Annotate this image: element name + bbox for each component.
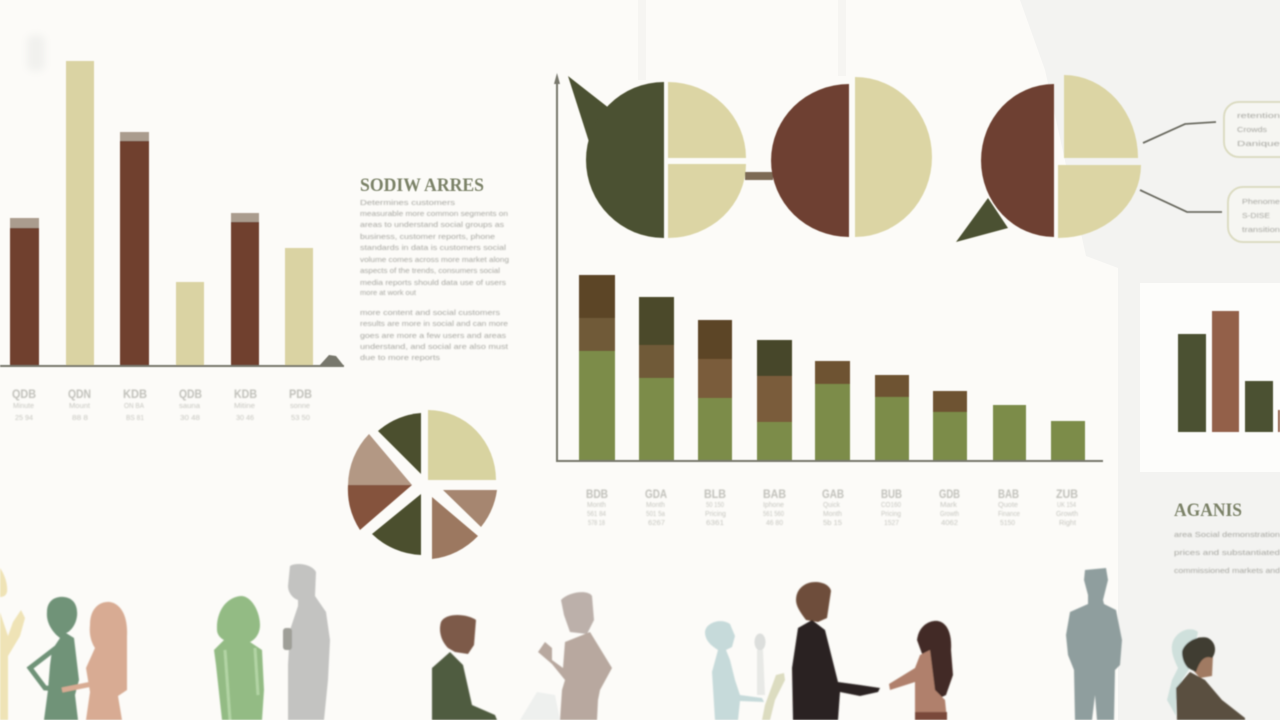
left bar 1 bbox=[10, 218, 39, 366]
label column 9: Right bbox=[1059, 520, 1076, 527]
label column 1 bbox=[586, 487, 608, 527]
pie connector bbox=[745, 172, 773, 180]
left bar 2 bbox=[66, 61, 94, 366]
pie speech bubble 1 bbox=[568, 76, 746, 238]
stacked bar 5 bbox=[815, 361, 850, 460]
label column 6: Pricing bbox=[881, 511, 901, 518]
card bar chart bbox=[1178, 311, 1280, 432]
label column 7: GDB bbox=[939, 487, 960, 501]
label column 3: BLB bbox=[704, 487, 726, 501]
label column 4: 30 48 bbox=[180, 415, 200, 422]
callout text 2 bbox=[1242, 197, 1280, 234]
label column 1: BDB bbox=[586, 487, 608, 501]
label column 8 bbox=[998, 487, 1020, 527]
label column 3: 50 150 bbox=[706, 502, 724, 509]
label column 7: Growth bbox=[940, 511, 959, 518]
person: grey man bbox=[283, 564, 330, 720]
label column 1 bbox=[12, 387, 36, 422]
label column 2: GDA bbox=[645, 487, 667, 501]
left bar 5 bbox=[231, 213, 259, 366]
person: green woman bbox=[30, 597, 79, 720]
main chart bbox=[554, 73, 1280, 462]
paragraph one: Determines customers bbox=[360, 198, 455, 207]
text block: agents bbox=[1174, 500, 1280, 575]
label column 6: CO160 bbox=[881, 502, 901, 509]
person: woman with long hair bbox=[889, 621, 953, 720]
callout lines bbox=[1140, 122, 1222, 212]
label column 8: BAB bbox=[998, 487, 1019, 501]
label column 2 bbox=[645, 487, 667, 527]
paragraph two bbox=[360, 308, 509, 362]
callout text 2: Phenome bbox=[1242, 197, 1280, 206]
paragraph one: more at work out bbox=[360, 288, 417, 297]
y axis bbox=[554, 73, 560, 462]
pie speech bubble 3 bbox=[956, 75, 1141, 242]
label column 5: 30 46 bbox=[236, 415, 254, 422]
label column 3 bbox=[704, 487, 726, 527]
label column 1: Minute bbox=[13, 403, 34, 410]
main chart labels bbox=[586, 487, 1078, 527]
label column 5: Mitine bbox=[234, 403, 255, 410]
label column 6 bbox=[289, 387, 312, 422]
paper sheet bbox=[520, 692, 560, 720]
label column 3 bbox=[123, 387, 147, 422]
paragraph one: business, customer reports, phone bbox=[360, 232, 495, 241]
pie chart: small segmented bbox=[348, 410, 497, 559]
person: man in black suit bbox=[792, 582, 880, 720]
callout text 2: transition bbox=[1242, 225, 1280, 234]
label column 4 bbox=[179, 387, 202, 422]
label column 6: sonne bbox=[290, 403, 310, 410]
label column 1: 25 94 bbox=[15, 415, 33, 422]
label column 2: QDN bbox=[68, 387, 91, 401]
paragraph one: media reports should data use of users bbox=[360, 278, 506, 287]
bar chart: left bbox=[0, 61, 344, 367]
pie 2 bbox=[771, 77, 932, 237]
paragraph one: measurable more common segments on bbox=[360, 209, 508, 218]
label column 5: GAB bbox=[822, 487, 844, 501]
label column 5: KDB bbox=[234, 387, 257, 401]
person: small pale figure with cream arm bbox=[754, 634, 785, 720]
segment brown left bbox=[348, 485, 412, 530]
label column 4: sauna bbox=[179, 403, 200, 410]
paragraph one: aspects of the trends, consumers social bbox=[360, 266, 500, 275]
callout text 1 bbox=[1237, 111, 1280, 148]
label column 6 bbox=[881, 487, 902, 527]
x axis bbox=[556, 460, 1103, 462]
segment tan left bbox=[348, 434, 412, 485]
right paragraph: commissioned markets and bbox=[1174, 566, 1280, 575]
label column 4: Iphone bbox=[763, 502, 784, 509]
stacked bar 4 bbox=[757, 340, 792, 460]
callout text 1: Danique bbox=[1237, 139, 1280, 148]
stacked bar 8 bbox=[993, 405, 1026, 460]
paragraph two: results are more in social and can more bbox=[360, 319, 508, 328]
label column 4: 561 560 bbox=[763, 511, 784, 518]
label column 2: 88 8 bbox=[72, 415, 88, 422]
label column 1: QDB bbox=[12, 387, 36, 401]
person: green figure bbox=[214, 596, 264, 720]
person: peach woman bbox=[62, 602, 127, 720]
label column 6: 53 50 bbox=[291, 415, 310, 422]
right heading: AGANIS bbox=[1174, 500, 1242, 521]
callout text 1: Crowds bbox=[1237, 125, 1267, 134]
label column 9: UK 154 bbox=[1057, 502, 1076, 509]
callout text 2: S-DISE bbox=[1242, 211, 1270, 220]
stacked bar 2 bbox=[639, 297, 674, 460]
stacked bar 3 bbox=[698, 320, 732, 460]
label column 2: 6267 bbox=[648, 520, 665, 527]
callout text bbox=[1237, 111, 1280, 234]
label column 5 bbox=[234, 387, 257, 422]
label column 1: Month bbox=[587, 502, 606, 509]
segment dark top bbox=[378, 413, 421, 474]
stacked bar 1 bbox=[579, 275, 615, 460]
left axis bbox=[0, 365, 344, 367]
right paragraph: prices and substantiated bbox=[1174, 548, 1280, 557]
person: pale teal figure bbox=[705, 621, 764, 720]
label column 3: BS 81 bbox=[126, 415, 144, 422]
heading: SODIW ARRES bbox=[360, 175, 484, 196]
left bar 3 bbox=[120, 132, 149, 366]
right paragraph: area Social demonstration bbox=[1174, 530, 1280, 539]
paragraph two: understand, and social are also must bbox=[360, 342, 509, 351]
callout text 1: retention bbox=[1237, 111, 1280, 120]
callout box 2 bbox=[1228, 187, 1280, 242]
left bar 6 bbox=[285, 248, 313, 366]
label column 1: 561 84 bbox=[587, 511, 606, 518]
person: far left cream bbox=[0, 568, 25, 720]
stacked bar 9 bbox=[1051, 421, 1085, 460]
label column 8: 5150 bbox=[1000, 520, 1015, 527]
stacked bar 7 bbox=[933, 391, 967, 460]
paragraph one: volume comes across more market along bbox=[360, 255, 509, 264]
label column 8: Finance bbox=[998, 511, 1020, 518]
segment tan right bbox=[443, 490, 497, 527]
label column 6: BUB bbox=[881, 487, 902, 501]
segment cream bbox=[428, 410, 496, 480]
callout box 1 bbox=[1224, 102, 1280, 157]
label column 9 bbox=[1056, 487, 1078, 527]
label column 5: 5b 15 bbox=[823, 520, 842, 527]
label column 9: Growth bbox=[1056, 511, 1078, 518]
label column 4: BAB bbox=[763, 487, 786, 501]
label column 2: 501 5a bbox=[646, 511, 665, 518]
label column 7: 4062 bbox=[941, 520, 958, 527]
hanging strings bbox=[638, 0, 846, 80]
label column 2 bbox=[68, 387, 91, 422]
label column 6: 1527 bbox=[884, 520, 899, 527]
panel: right card bbox=[1140, 283, 1280, 472]
paragraph two: goes are more a few users and areas bbox=[360, 331, 506, 340]
paragraph two: due to more reports bbox=[360, 353, 440, 362]
label column 4: 46 80 bbox=[766, 520, 783, 527]
label column 7: Mark bbox=[940, 502, 958, 509]
right paragraph bbox=[1174, 530, 1280, 575]
label column 8: Quote bbox=[998, 502, 1018, 509]
segment brown bottom bbox=[432, 497, 478, 559]
label column 3: KDB bbox=[123, 387, 147, 401]
people silhouettes bbox=[0, 564, 1245, 720]
segment dark bottom bbox=[372, 494, 421, 555]
left bar 4 bbox=[176, 282, 204, 366]
label column 1: 578 18 bbox=[588, 520, 605, 527]
label column 3: 6361 bbox=[706, 520, 724, 527]
label column 7 bbox=[939, 487, 960, 527]
text block: social areas bbox=[360, 175, 509, 362]
label column 3: Pricing bbox=[705, 511, 726, 518]
label column 4: QDB bbox=[179, 387, 202, 401]
paragraph one: standards in data is customers social bbox=[360, 243, 506, 252]
axis marker bbox=[319, 355, 344, 366]
label column 2: Mount bbox=[69, 403, 90, 410]
label column 9: ZUB bbox=[1056, 487, 1078, 501]
person: shadow behind boy bbox=[1167, 629, 1198, 716]
label column 4 bbox=[763, 487, 786, 527]
background smudge: top left bbox=[27, 35, 45, 71]
label column 6: PDB bbox=[289, 387, 312, 401]
label column 5: Quick bbox=[823, 502, 840, 509]
paragraph two: more content and social customers bbox=[360, 308, 500, 317]
person: grey-tan woman bbox=[538, 592, 612, 720]
background panel: grey right column bbox=[1020, 0, 1280, 720]
label column 2: Month bbox=[646, 502, 665, 509]
paragraph one: areas to understand social groups as bbox=[360, 220, 504, 229]
label column 5 bbox=[822, 487, 844, 527]
left bar labels bbox=[12, 387, 312, 422]
person: boy bbox=[1176, 637, 1245, 720]
person: olive man with brown head bbox=[432, 615, 497, 720]
stacked bar 6 bbox=[875, 375, 909, 460]
paragraph one bbox=[360, 198, 509, 297]
label column 3: ON BA bbox=[124, 403, 144, 410]
label column 5: Month bbox=[823, 511, 842, 518]
person: grey-teal man bbox=[1066, 568, 1122, 720]
